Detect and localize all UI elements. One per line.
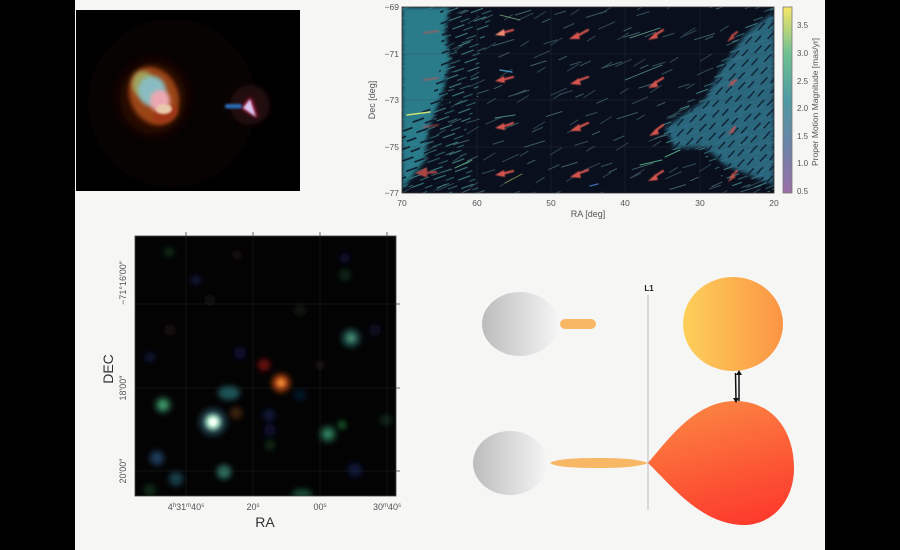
x axis labels: 50 [546, 198, 556, 208]
x axis labels: 60 [472, 198, 482, 208]
y axis labels: −73 [385, 95, 399, 105]
x axis labels: 40 [620, 198, 630, 208]
x axis tick labels: 30 [373, 502, 383, 512]
panel: proper motion quiver chart [367, 2, 779, 219]
y axis tick labels: 18′00″ [118, 375, 128, 400]
x axis tick labels: s [257, 503, 260, 509]
icon: left galaxy [120, 59, 188, 134]
x axis tick labels: 40 [388, 502, 398, 512]
panel: RGB sky image [100, 232, 401, 530]
top gray star [482, 292, 558, 356]
y axis labels: −77 [385, 188, 399, 198]
x axis tick labels [168, 502, 401, 512]
colorbar: 0.5 [797, 187, 809, 196]
top yellow star [683, 277, 783, 371]
y axis labels: −69 [385, 2, 399, 12]
x axis title: RA [deg] [571, 209, 605, 219]
colorbar: 1.5 [797, 132, 809, 141]
L1 label: L1 [644, 284, 654, 293]
x axis labels [397, 198, 779, 208]
y axis labels [385, 2, 399, 198]
x axis tick labels: 20 [246, 502, 257, 512]
y axis tick labels: −71°16′00″ [118, 260, 128, 305]
colorbar: Proper Motion Magnitude [mas/yr] [810, 38, 820, 166]
stars [144, 247, 392, 499]
y axis tick labels [118, 260, 128, 483]
red arrows [418, 29, 737, 182]
x axis tick labels: s [201, 503, 204, 509]
y axis labels: −71 [385, 49, 399, 59]
bottom accretion stream [550, 458, 648, 468]
x axis tick labels: m [383, 503, 388, 509]
colorbar [783, 7, 820, 196]
top accretion disc [560, 319, 596, 329]
x axis labels: 30 [695, 198, 705, 208]
x axis tick labels: h [173, 503, 176, 509]
y axis tick labels: 20′00″ [118, 458, 128, 483]
highlighted green streaks [407, 15, 680, 186]
x axis title: RA [255, 514, 275, 530]
grid lines [402, 7, 774, 193]
x axis tick labels: 31 [176, 502, 186, 512]
panel: binary star Roche lobe diagram [473, 277, 794, 525]
colorbar: 2.5 [797, 77, 809, 86]
x axis tick labels: 4 [168, 502, 173, 512]
colorbar: 3.5 [797, 21, 809, 30]
x axis tick labels: 40 [191, 502, 201, 512]
icon: right galaxy [225, 85, 270, 125]
x axis tick labels: m [186, 503, 191, 509]
quiver field [402, 7, 774, 193]
colorbar: 3.0 [797, 49, 809, 58]
panel: telescope image of two galaxies [76, 10, 300, 191]
x axis tick labels: 00 [313, 502, 324, 512]
y axis title: Dec [deg] [367, 81, 377, 119]
x axis labels: 20 [769, 198, 779, 208]
L1 line [647, 295, 649, 510]
colorbar: 1.0 [797, 159, 809, 168]
x axis labels: 70 [397, 198, 407, 208]
y axis labels: −75 [385, 142, 399, 152]
arrows: radius change [733, 370, 742, 403]
x axis tick labels: s [398, 503, 401, 509]
bottom gray star [473, 431, 547, 495]
x axis tick labels: s [324, 503, 327, 509]
colorbar: 2.0 [797, 104, 809, 113]
bottom red Roche lobe star [648, 401, 794, 525]
grid lines [135, 236, 396, 496]
y axis title: DEC [100, 354, 116, 384]
